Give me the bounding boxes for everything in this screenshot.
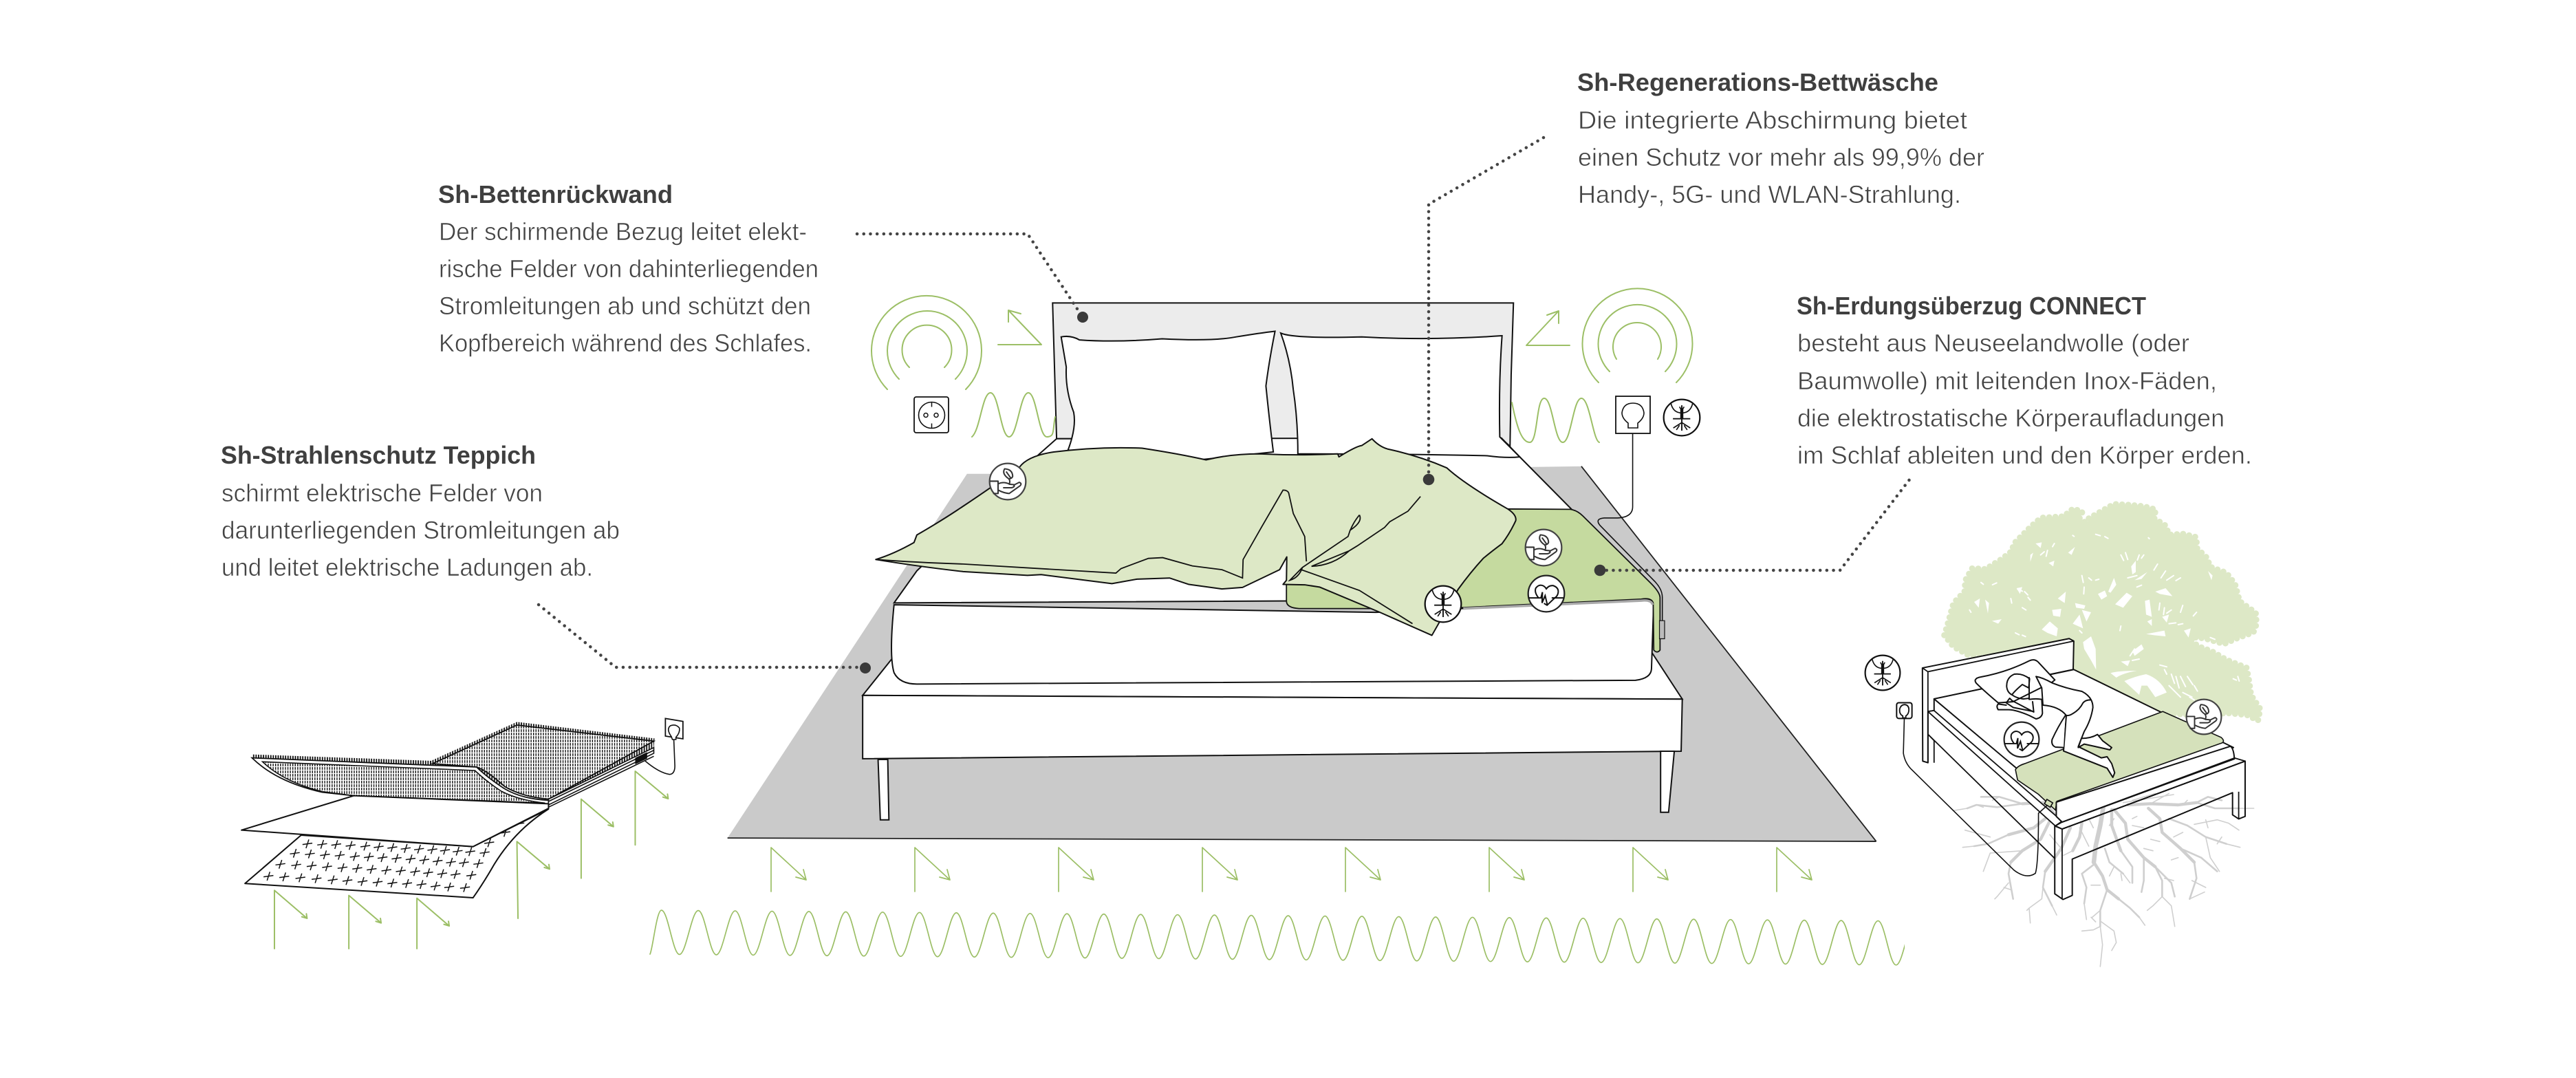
duvet <box>876 439 1516 636</box>
hip line <box>2066 700 2090 715</box>
body text: Bettwäsche description <box>1578 106 1984 208</box>
person arm <box>2006 698 2034 712</box>
wave right <box>1512 398 1599 442</box>
text block: Sh-Regenerations-Bettwäsche <box>1577 68 1984 208</box>
conductive layer with plus marks <box>245 809 548 898</box>
body text: Bettenrückwand description <box>439 217 819 357</box>
body text: Teppich description: darunterliegenden Stromleitungen ab <box>221 516 620 544</box>
bed base front <box>863 696 1682 759</box>
carpet left flap hatch <box>263 762 545 803</box>
carpet back hatch border <box>431 722 655 799</box>
side rail <box>1928 711 2062 826</box>
icon: plant in hand on cover <box>1526 530 1561 565</box>
illustration: carpet layers <box>241 718 683 949</box>
person body and legs <box>2036 676 2114 777</box>
icon: tree and roots beside small bed <box>1865 656 1900 690</box>
body text: Erdungsüberzug description: besteht aus Neuseelandwolle (oder <box>1797 329 2189 357</box>
heading: Sh-Regenerations-Bettwäsche: Sh-Regenerations-Bettwäsche <box>1577 68 1938 96</box>
icon: tree and roots on cover <box>1425 586 1461 622</box>
leader: Bettwäsche <box>1423 138 1544 485</box>
icon: tree and roots right of socket <box>1664 400 1700 435</box>
carpet edge layers <box>548 748 654 807</box>
cable and tag of grounding cover <box>1598 434 1663 622</box>
long sine wave <box>650 910 1939 965</box>
body text: Erdungsüberzug description: die elektrostatische Körperaufladungen <box>1797 404 2225 432</box>
sleeping person with pillow <box>1976 660 2114 777</box>
leader: Bettenrückwand <box>857 234 1088 323</box>
heading: Sh-Erdungsüberzug CONNECT: Sh-Erdungsüberzug CONNECT <box>1797 292 2146 320</box>
mattress <box>891 601 1654 684</box>
body text: Bettwäsche description: Handy-, 5G- und WLAN-Strahlung. <box>1578 180 1961 208</box>
field arcs left <box>872 296 982 389</box>
arrow right <box>1526 311 1570 345</box>
body text: Bettenrückwand description: Kopfbereich während des Schlafes. <box>439 329 812 357</box>
body text: Bettwäsche description: einen Schutz vor mehr als 99,9% der <box>1578 143 1984 171</box>
text block: Sh-Strahlenschutz Teppich <box>221 441 620 581</box>
carpet top layer right <box>433 725 654 799</box>
icon: plant in hand on small bed <box>2187 700 2221 734</box>
leader: Teppich <box>539 605 871 673</box>
grey seam of grounding cover <box>1463 601 1653 609</box>
bed frame front <box>2055 761 2245 900</box>
bed frame side rail lower <box>1928 734 2055 859</box>
tree roots <box>1953 793 2254 967</box>
bed sheet top <box>894 438 1653 603</box>
body text: Erdungsüberzug description: im Schlaf ableiten und den Körper erden. <box>1797 441 2252 469</box>
icon: wall socket left <box>914 397 949 433</box>
grounding cover CONNECT <box>1286 509 1660 652</box>
body text: Erdungsüberzug description: Baumwolle) mit leitenden Inox-Fäden, <box>1797 367 2217 395</box>
headboard small bed <box>1923 638 2074 763</box>
bed leg left <box>878 759 889 820</box>
carpet black label <box>635 752 647 764</box>
body text: Erdungsüberzug description <box>1797 329 2252 469</box>
pillow right <box>1281 333 1519 457</box>
bed base top <box>863 652 1682 699</box>
carpet left flap <box>252 758 548 804</box>
icon: plant in hand on duvet <box>990 464 1026 499</box>
person face and sleeve <box>1997 678 2042 719</box>
grounding cover small bed <box>2015 711 2223 810</box>
icon: heart on small bed <box>2004 722 2039 757</box>
person near thigh <box>2052 715 2066 748</box>
icon: heart on cover <box>1528 576 1564 612</box>
body text: Bettenrückwand description: Stromleitungen ab und schützt den <box>439 292 811 320</box>
carpet top layer hatch <box>433 725 654 799</box>
icon: wall socket with plug right <box>1616 396 1650 433</box>
pillow small bed <box>1976 660 2055 703</box>
person far leg and foot <box>2078 735 2112 750</box>
headboard <box>1052 303 1513 446</box>
mattress top small bed <box>1934 669 2233 802</box>
pillow left <box>1061 331 1275 460</box>
field arcs right <box>1582 288 1692 382</box>
small bed frame <box>1896 638 2245 900</box>
body text: Bettenrückwand description: Der schirmende Bezug leitet elekt- <box>439 217 807 246</box>
small bed cable and plug <box>1896 702 2053 876</box>
body text: Teppich description <box>221 479 620 581</box>
heading: Sh-Bettenrückwand: Sh-Bettenrückwand <box>438 180 673 208</box>
carpet cable and plug <box>645 718 683 775</box>
carpet left hatch border <box>252 755 433 765</box>
arrows under rug <box>771 848 1812 892</box>
wave left <box>972 393 1055 437</box>
body text: Teppich description: und leitet elektrische Ladungen ab. <box>221 553 593 581</box>
body text: Bettwäsche description: Die integrierte Abschirmung bietet <box>1578 106 1967 134</box>
leader: Erdungsüberzug <box>1594 476 1912 576</box>
rug <box>728 466 1876 841</box>
main illustration: bed with rug <box>728 303 1876 841</box>
body text: Bettenrückwand description: rische Felder von dahinterliegenden <box>439 255 819 283</box>
body text: Teppich description: schirmt elektrische Felder von <box>221 479 543 507</box>
green arrows through carpet <box>274 771 668 949</box>
text block: Sh-Bettenrückwand <box>438 180 819 357</box>
white middle layer <box>241 796 548 847</box>
person hair <box>2006 674 2030 695</box>
heading: Sh-Strahlenschutz Teppich: Sh-Strahlenschutz Teppich <box>221 441 536 469</box>
bed leg right <box>1660 751 1674 812</box>
tree silhouette <box>1945 504 2260 720</box>
text block: Sh-Erdungsüberzug CONNECT <box>1797 292 2252 469</box>
arrow left <box>998 310 1041 345</box>
foot end of mattress <box>2056 746 2234 822</box>
